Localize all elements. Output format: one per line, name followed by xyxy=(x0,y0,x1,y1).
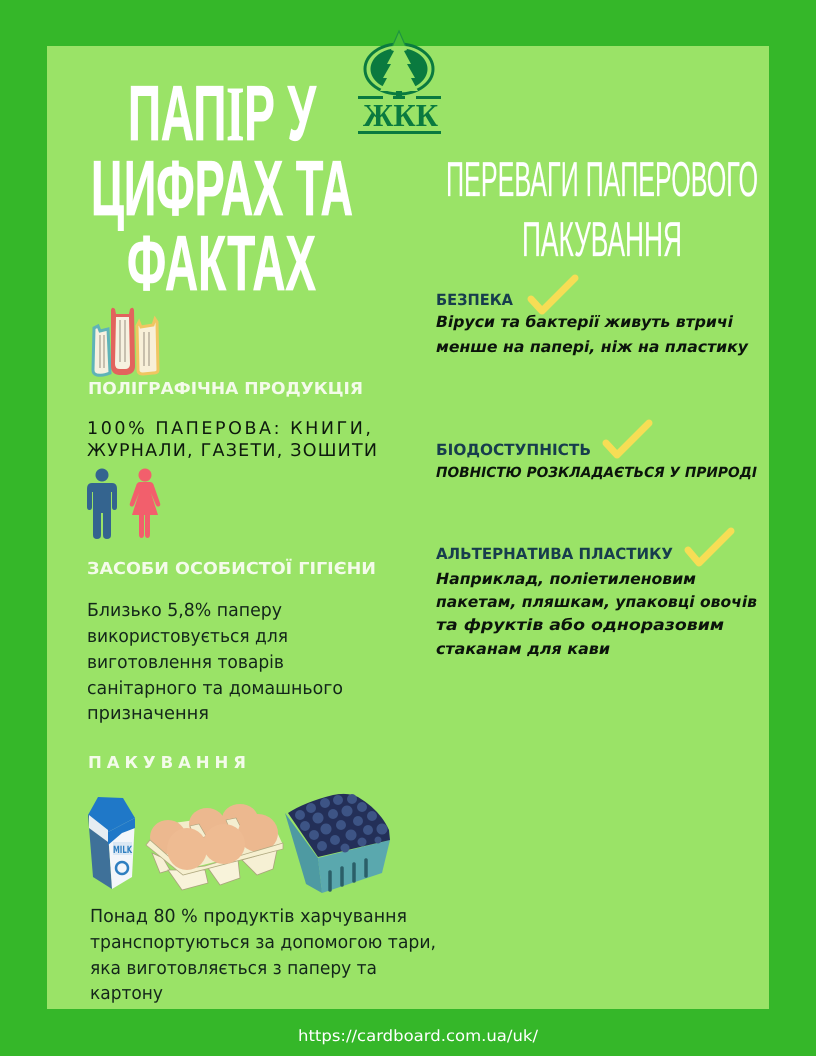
heading: advantages of paper packaging xyxy=(446,153,758,267)
icon: milk carton xyxy=(88,797,135,889)
logo: ЖКК: ЖКК xyxy=(363,97,438,133)
text: packaging detail: картону xyxy=(90,983,163,1004)
title: ПАПІР У xyxy=(128,69,317,157)
icon: check mark xyxy=(531,278,575,311)
heading: advantages of paper packaging: ПАКУВАННЯ xyxy=(522,213,682,267)
link: website: https://cardboard.com.ua/uk/ xyxy=(298,1027,539,1045)
icon: books xyxy=(93,308,158,375)
block: safety: Віруси та бактерії живуть втричі xyxy=(436,313,734,331)
logo: ЖКК xyxy=(358,31,441,134)
title: ФАКТАХ xyxy=(127,219,316,307)
icon: check mark xyxy=(688,531,731,563)
heading: personal hygiene: ЗАСОБИ ОСОБИСТОЇ ГІГІЄНИ xyxy=(87,558,376,578)
title xyxy=(91,69,353,307)
title: ЦИФРАХ ТА xyxy=(91,144,353,232)
icon: blueberry basket xyxy=(285,794,390,893)
icon: egg carton xyxy=(146,804,283,890)
text: printed products detail: 100% ПАПЕРОВА: КНИГИ, xyxy=(87,419,371,439)
text: packaging detail xyxy=(90,906,436,1004)
text: printed products detail xyxy=(87,419,377,461)
icon: milk carton: MILK xyxy=(113,845,133,856)
text: hygiene detail: призначення xyxy=(87,703,209,724)
block: alternative to plastic: пакетам, пляшкам, упаковці овочів xyxy=(436,593,757,611)
text: hygiene detail: санітарного та домашнього xyxy=(87,678,343,699)
text: hygiene detail xyxy=(87,600,343,724)
block: alternative to plastic: та фруктів або одноразовим xyxy=(436,616,724,634)
block: biodegradability xyxy=(436,423,757,481)
text: packaging detail: Понад 80 % продуктів харчування xyxy=(90,906,407,927)
heading: printed products: ПОЛІГРАФІЧНА ПРОДУКЦІЯ xyxy=(88,379,363,398)
text: hygiene detail: використовується для xyxy=(87,626,288,647)
text: packaging detail: яка виготовляється з паперу та xyxy=(90,958,377,979)
block: safety xyxy=(436,278,749,356)
block: alternative to plastic: АЛЬТЕРНАТИВА ПЛАСТИКУ xyxy=(436,545,673,563)
text: hygiene detail: Близько 5,8% паперу xyxy=(87,600,282,621)
block: biodegradability: БІОДОСТУПНІСТЬ xyxy=(436,441,591,459)
block: biodegradability: ПОВНІСТЮ РОЗКЛАДАЄТЬСЯ У ПРИРОДІ xyxy=(436,465,757,481)
block: safety: БЕЗПЕКА xyxy=(436,291,513,309)
block: alternative to plastic: Наприклад, поліетиленовим xyxy=(436,570,696,588)
text: printed products detail: ЖУРНАЛИ, ГАЗЕТИ, ЗОШИТИ xyxy=(87,441,377,461)
block: alternative to plastic xyxy=(436,531,757,658)
icon: check mark xyxy=(606,423,649,455)
heading: packaging: ПАКУВАННЯ xyxy=(88,753,246,772)
block: safety: менше на папері, ніж на пластику xyxy=(436,338,749,356)
text: packaging detail: транспортуються за допомогою тари, xyxy=(90,932,436,953)
text: hygiene detail: виготовлення товарів xyxy=(87,652,284,673)
block: alternative to plastic: стаканам для кави xyxy=(436,640,610,658)
icon: man and woman xyxy=(87,468,160,539)
